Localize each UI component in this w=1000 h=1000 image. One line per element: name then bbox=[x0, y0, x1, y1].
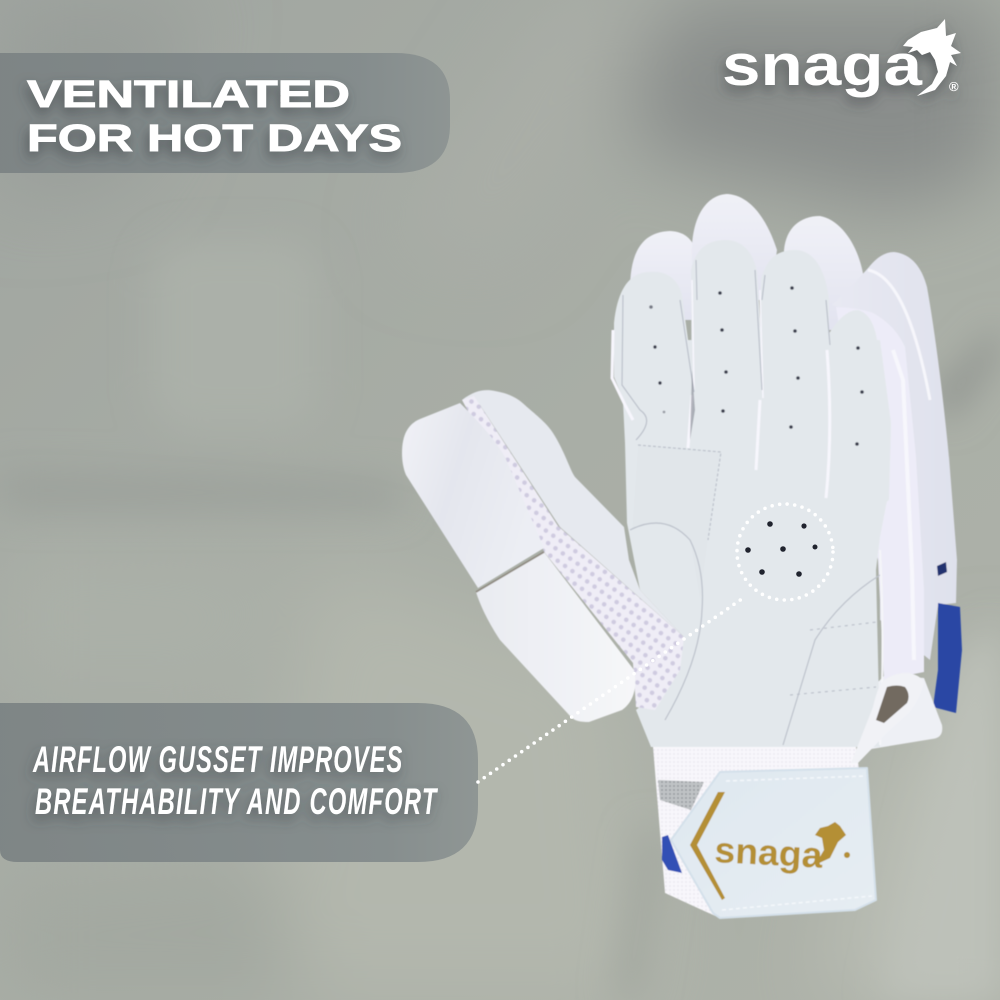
logo: snaga top right bbox=[722, 19, 961, 98]
dark gap beside index finger bbox=[690, 370, 695, 440]
glove bbox=[402, 194, 962, 918]
ring finger bbox=[760, 250, 829, 500]
thumb lower block bbox=[476, 552, 635, 722]
callout text: AIRFLOW GUSSET IMPROVES bbox=[32, 739, 402, 780]
wrist band bbox=[653, 747, 876, 918]
panel: callout bbox=[0, 703, 478, 862]
callout text: BREATHABILITY AND COMFORT bbox=[35, 781, 439, 822]
gold snaga logo: snaga bbox=[714, 829, 825, 876]
thumb upper block bbox=[402, 403, 544, 588]
finger vent holes bbox=[649, 286, 864, 446]
heading: ventilated for hot days: FOR HOT DAYS bbox=[27, 118, 402, 160]
blue wrist pad bbox=[933, 603, 962, 713]
heading: ventilated for hot days bbox=[27, 74, 402, 160]
logo: snaga top right: snaga bbox=[722, 33, 923, 98]
palm and fingers bbox=[614, 240, 891, 747]
panel: headline band bbox=[0, 53, 450, 173]
velcro strap bbox=[671, 768, 876, 918]
gold chevron bbox=[690, 792, 725, 900]
palm patch lighter bbox=[632, 445, 721, 600]
vent hole cluster highlight bbox=[737, 504, 833, 600]
mesh gusset bbox=[462, 396, 684, 710]
finger slits bbox=[612, 280, 830, 498]
white back plate bbox=[860, 675, 942, 750]
little finger bbox=[825, 310, 891, 530]
wrist loop bbox=[851, 673, 924, 763]
pointer: dotted leader line bbox=[478, 596, 746, 782]
logo: snaga top right: ® bbox=[949, 79, 959, 94]
callout text bbox=[32, 739, 439, 822]
middle finger bbox=[691, 240, 765, 470]
back of fingers bbox=[630, 194, 864, 330]
thumb leather bbox=[462, 390, 684, 637]
heading: ventilated for hot days: VENTILATED bbox=[27, 74, 350, 116]
index finger bbox=[614, 272, 695, 445]
gold snaga logo bbox=[714, 822, 850, 876]
side elastic panel bbox=[836, 307, 924, 680]
back of little finger and side bbox=[832, 252, 957, 660]
stitching seams bbox=[622, 260, 882, 745]
